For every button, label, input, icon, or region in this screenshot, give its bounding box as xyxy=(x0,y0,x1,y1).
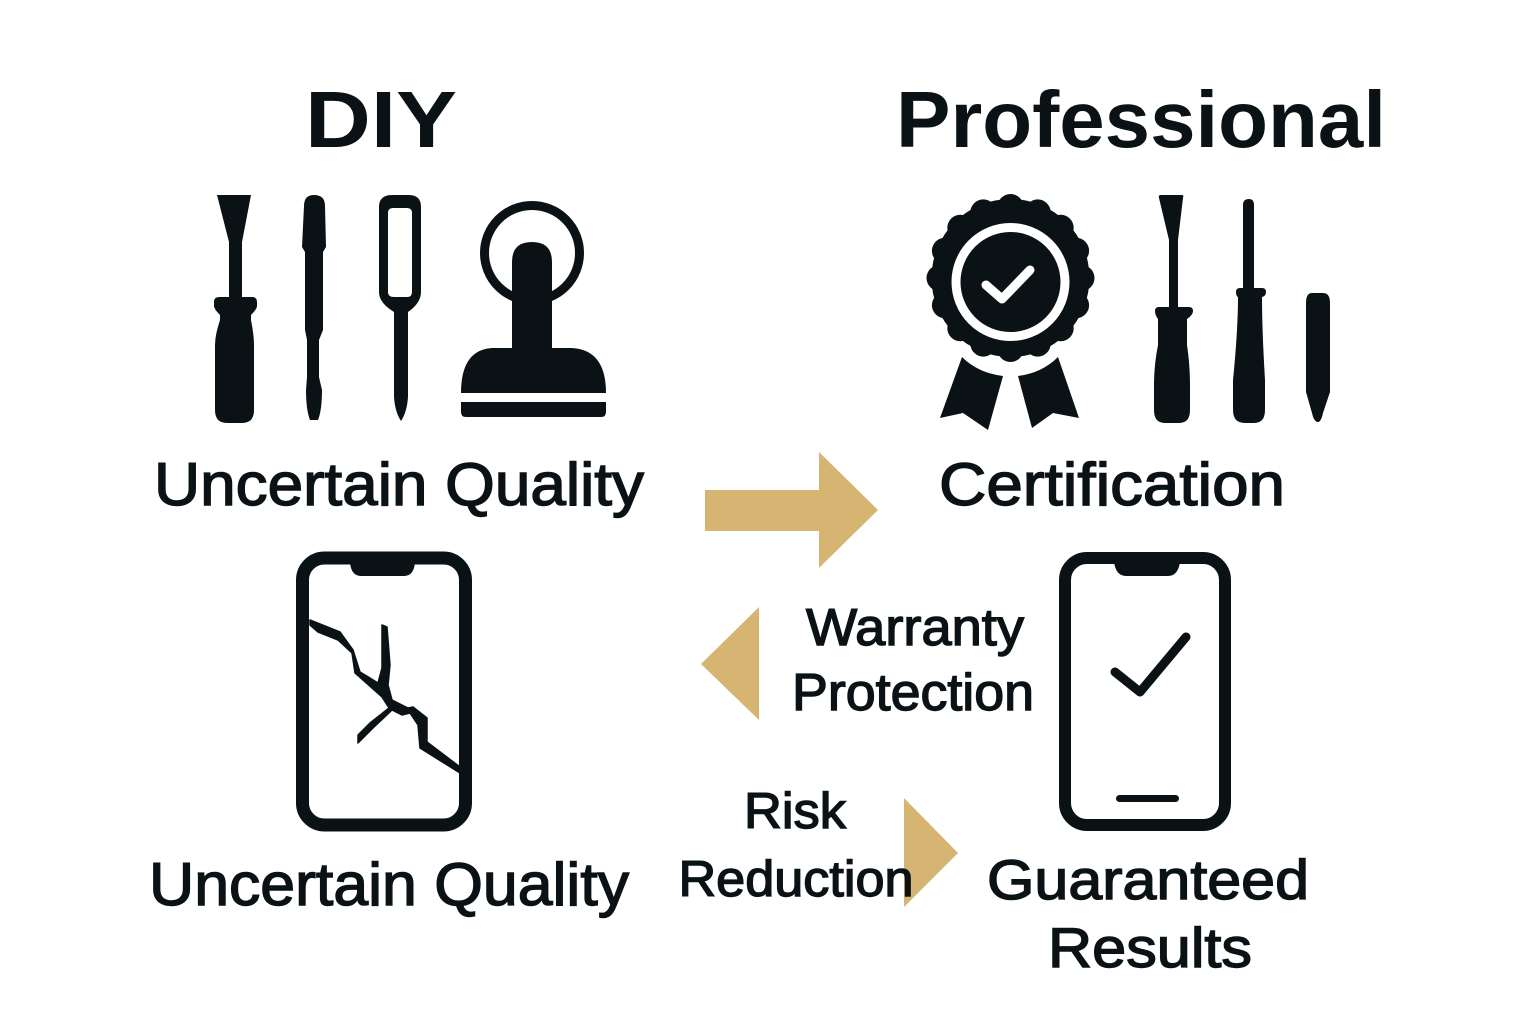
label: Certification: Certification xyxy=(939,451,1285,518)
ribbon left xyxy=(940,357,1003,430)
label: Risk Reduction: Risk xyxy=(744,783,847,839)
label: Warranty Protection: Protection xyxy=(792,664,1034,722)
label: Guaranteed Results: Results xyxy=(1048,916,1252,979)
label: Warranty Protection: Warranty xyxy=(806,599,1024,657)
label: Guaranteed Results xyxy=(987,848,1309,979)
label: Risk Reduction xyxy=(678,783,914,907)
icon: certification badge xyxy=(926,194,1094,430)
icon: small driver xyxy=(1306,293,1330,422)
label: Risk Reduction: Reduction xyxy=(678,851,914,907)
icon: DIY tools xyxy=(214,195,606,423)
label: Warranty Protection xyxy=(792,599,1034,722)
icon: screwdriver A xyxy=(1154,195,1193,423)
heading: Professional: Professional xyxy=(896,75,1386,164)
icon: screwdriver 1 xyxy=(214,195,257,423)
rosette check xyxy=(986,270,1030,299)
rosette xyxy=(926,194,1094,362)
arrow: left xyxy=(701,607,759,720)
icon: phone with check xyxy=(1065,558,1225,825)
icon: screwdriver 2 xyxy=(302,195,326,420)
label: Guaranteed Results: Guaranteed xyxy=(987,848,1309,911)
arrow: right bottom xyxy=(904,798,958,907)
icon: screwdriver B xyxy=(1233,199,1266,423)
label: Uncertain Quality top: Uncertain Quality xyxy=(154,451,644,518)
icon: professional tools xyxy=(1154,195,1330,423)
ribbon right xyxy=(1018,357,1079,428)
icon: spudger xyxy=(379,195,421,421)
icon: suction stamp xyxy=(461,206,606,417)
heading: DIY: DIY xyxy=(305,75,457,164)
icon: cracked phone xyxy=(302,558,466,825)
rosette ring xyxy=(956,228,1065,336)
crack lines xyxy=(310,620,460,773)
arrow: right top xyxy=(705,452,878,568)
label: Uncertain Quality bottom: Uncertain Quality xyxy=(149,851,629,918)
